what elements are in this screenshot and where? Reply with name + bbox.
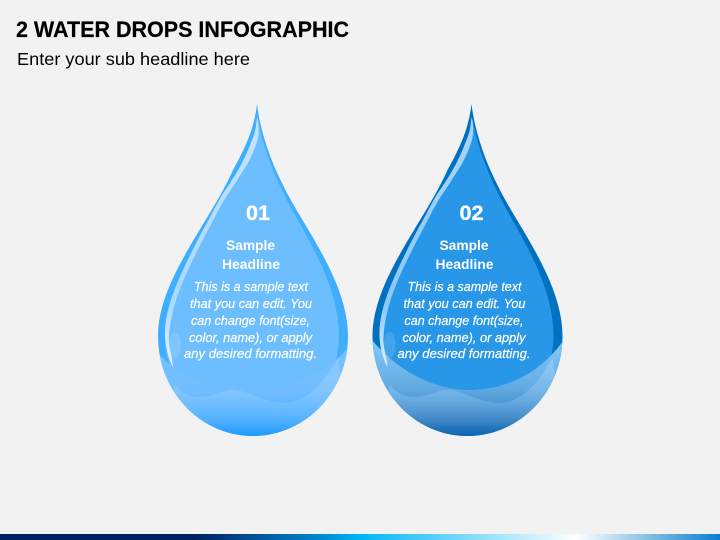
drop 2 headline: Headline: [436, 256, 494, 272]
drop 2 body text: This is a sample text: [408, 280, 522, 294]
subtitle: Enter your sub headline here: [17, 49, 250, 69]
drop 2 lower water band: [372, 340, 562, 436]
drop 1 outer shell: [158, 104, 348, 436]
drop 2 inner body: [379, 118, 554, 430]
drop 1 headline: Sample: [226, 237, 275, 253]
drop 1 glint: [169, 332, 181, 358]
drop 2 highlight: [379, 117, 473, 367]
drop 1 highlight: [165, 117, 259, 367]
drop 2 body text: that you can edit. You: [404, 297, 526, 311]
drop 1 number: 01: [246, 202, 270, 225]
drop 1 body text: any desired formatting.: [184, 347, 317, 361]
water drop 1: [150, 104, 350, 440]
drop 2 headline: Sample: [440, 237, 489, 253]
drop 1 inner body: [165, 118, 339, 430]
drop 2 number: 02: [460, 202, 484, 225]
drop 2 glint: [384, 332, 396, 358]
drop 1 headline: Headline: [222, 256, 280, 272]
drop 2 body text: any desired formatting.: [398, 347, 530, 361]
drop 1 body text: that you can edit. You: [190, 297, 312, 311]
drop 2 outer shell: [372, 104, 562, 436]
water drop 2: [364, 104, 564, 440]
drop 2 body text: color, name), or apply: [402, 331, 526, 345]
drop 2 body text: can change font(size,: [404, 314, 524, 328]
drop 1 lower water band: [160, 348, 348, 436]
drop 1 body text: can change font(size,: [191, 314, 310, 328]
drop 1 body text: color, name), or apply: [189, 331, 313, 345]
title: 2 WATER DROPS INFOGRAPHIC: [16, 17, 349, 42]
drop 1 body text: This is a sample text: [194, 280, 309, 294]
drop 1 wave: [174, 358, 340, 418]
bottom gradient bar: [0, 534, 720, 540]
drop 2 wave: [388, 358, 555, 420]
